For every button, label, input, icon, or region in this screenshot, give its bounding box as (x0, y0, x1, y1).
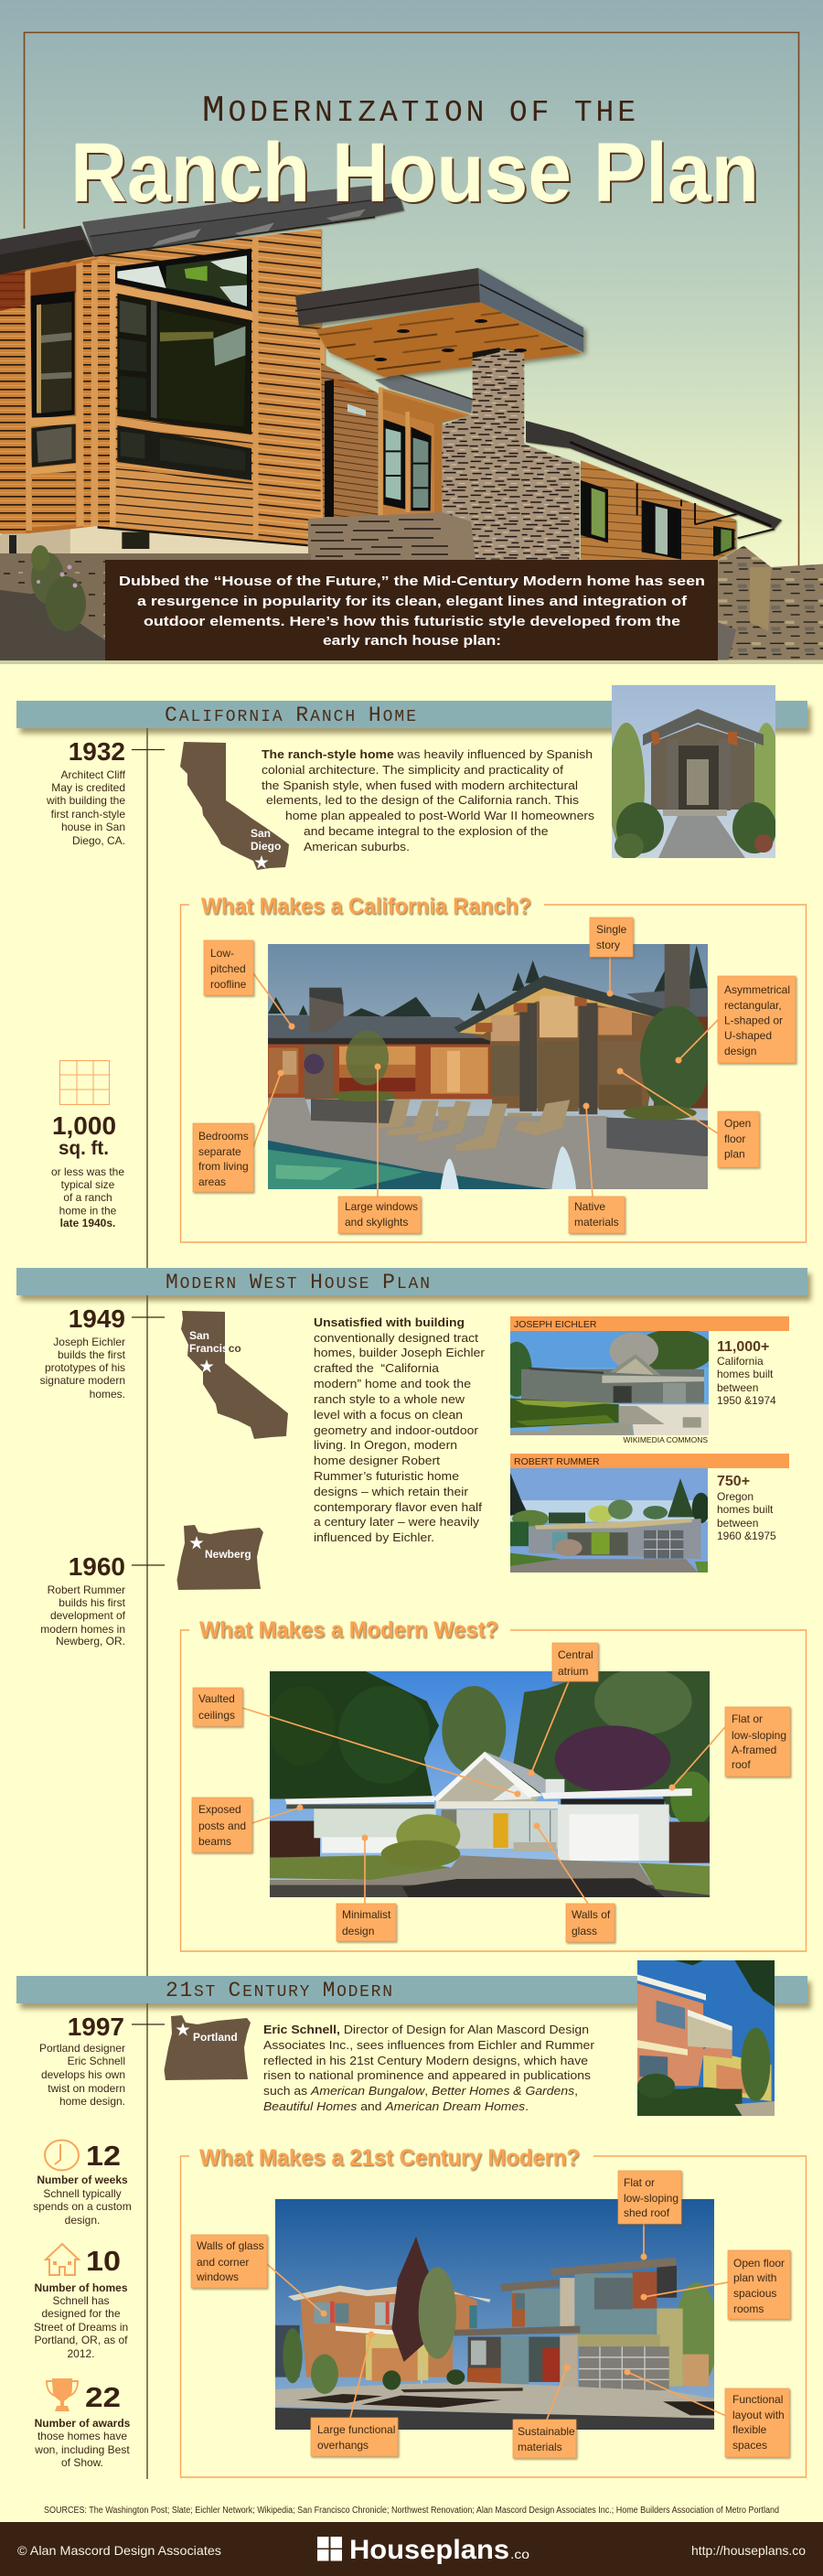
section header: California Ranch Home (16, 701, 807, 728)
event: 1997: twist on modern (48, 2082, 125, 2095)
illustration: house main body (0, 183, 404, 561)
event: 1932: 1932 (69, 737, 125, 766)
text: ranch-style home: The ranch-style home was heavily influenced by Spanish (262, 747, 593, 761)
stat: 1,000 sq. ft.: typical size (61, 1178, 115, 1191)
panel heading: What Makes a California Ranch? (201, 894, 531, 919)
callout: Functional layout with flexible spaces: Functional (732, 2393, 783, 2406)
event: 1997: Portland designer (39, 2042, 125, 2055)
text: ranch-style home (262, 747, 595, 853)
illustration: house canopy (295, 268, 583, 377)
stat: 1,000 sq. ft.: late 1940s. (60, 1217, 115, 1229)
callout: Low-pitched roofline: pitched (210, 962, 246, 975)
illustration: left ground and shrub (0, 545, 311, 660)
callout: Walls of glass and corner windows: windows (196, 2270, 239, 2283)
callout: Asymmetrical design: rectangular, (724, 999, 782, 1012)
callout: Flat or low-sloping A-framed roof: A-framed (732, 1744, 776, 1756)
event: 1949: signature modern (40, 1374, 125, 1387)
stat: 11,000+: 1950 &1974 (717, 1394, 776, 1407)
callout: Flat or low-sloping A-framed roof: low-sloping (732, 1729, 786, 1742)
photo: California ranch at dusk (268, 944, 708, 1189)
text: Unsatisfied with building (314, 1315, 486, 1544)
callout: Walls of glass: Walls of (572, 1908, 611, 1921)
callout: Open floor plan with spacious rooms: Open floor (733, 2257, 785, 2270)
text: Eric Schnell: risen to national prominence and appeared in publications (263, 2068, 592, 2082)
text: Unsatisfied with building: designs – which retain their (314, 1485, 469, 1498)
intro text box (105, 560, 718, 660)
stat: 11,000+ (717, 1339, 776, 1407)
icon: clock (45, 2141, 79, 2170)
text: Eric Schnell: Eric Schnell, Director of Design for Alan Mascord Design (263, 2023, 589, 2036)
hero title line two: Ranch House Plan (72, 128, 761, 221)
callout: Exposed posts and beams: posts and (198, 1819, 246, 1832)
card: Joseph Eichler: JOSEPH EICHLER (514, 1319, 597, 1330)
callout: Central atrium: atrium (558, 1665, 588, 1678)
text: ranch-style home: home plan appealed to post-World War II homeowners (285, 809, 595, 822)
callout: Functional layout with flexible spaces: layout with (732, 2409, 785, 2421)
section header: California Ranch Home: CALIFORNIA RANCH HOME (165, 703, 416, 727)
callout: Bedrooms separate: from living (198, 1160, 249, 1173)
callout: Minimalist design (337, 1835, 396, 1941)
callout: Low-pitched roofline: roofline (210, 978, 247, 991)
callout: Open floor plan with spacious rooms (640, 2250, 790, 2319)
callout: Vaulted ceilings: ceilings (198, 1709, 235, 1722)
event: 1932 (46, 737, 165, 847)
callout: Walls of glass (534, 1822, 615, 1942)
event: 1960: modern homes in (40, 1623, 125, 1636)
hero title line two: Ranch House Plan (70, 126, 759, 220)
stat: 750+: between (717, 1517, 758, 1530)
callout: Flat or low-sloping A-framed roof: roof (732, 1758, 751, 1771)
callout: Sustainable materials: Sustainable (518, 2425, 575, 2438)
stat: 10 homes: Number of homes (34, 2281, 128, 2294)
callout: Low-pitched roofline: Low- (210, 947, 234, 960)
intro text box: Dubbed the “House of the Future,” the Mid-Century Modern home has seen (119, 574, 705, 589)
event: 1932: Diego, CA. (72, 834, 125, 847)
text: Unsatisfied with building: influenced by Eichler. (314, 1530, 434, 1544)
hero title line one: MODERNIZATION OF THE (202, 91, 636, 133)
event: 1960: development of (50, 1609, 126, 1622)
text: ranch-style home: and became integral to the explosion of the (304, 824, 549, 838)
photo: Rummer home (510, 1468, 708, 1572)
map: Oregon with Newberg (177, 1525, 263, 1590)
stat: 10 homes: Portland, OR, as of (34, 2334, 128, 2346)
intro text box: a resurgence in popularity for its clean, elegant lines and integration of (137, 594, 688, 609)
callout: Open floor plan: Open (724, 1117, 751, 1130)
event: 1932: May is credited (51, 781, 125, 794)
callout: Large windows and skylights (338, 1063, 421, 1233)
event: 1949 (40, 1304, 165, 1401)
callout: Native materials (569, 1103, 625, 1233)
card: Joseph Eichler: WIKIMEDIA COMMONS (623, 1435, 708, 1444)
logo: Houseplans.co: Houseplans (349, 2535, 509, 2565)
callout: Exposed posts and beams: beams (198, 1835, 231, 1848)
card: Robert Rummer (510, 1454, 789, 1572)
stat: 11,000+: homes built (717, 1368, 774, 1380)
callout: Flat or low-sloping shed roof (618, 2171, 681, 2259)
stat: 12 weeks: 12 (86, 2140, 121, 2172)
callout: Asymmetrical design: U-shaped (724, 1029, 772, 1042)
text: ranch-style home: colonial architecture. The simplicity and practicality of (262, 763, 563, 777)
text: Unsatisfied with building: level with a focus on clean (314, 1408, 463, 1422)
illustration: house low stone wall (308, 512, 476, 560)
callout: Flat or low-sloping shed roof: Flat or (624, 2176, 655, 2189)
callout: Bedrooms separate: areas (198, 1175, 226, 1188)
callout: Open floor plan with spacious rooms: spacious (733, 2287, 776, 2300)
text: Unsatisfied with building: Unsatisfied with building (314, 1315, 465, 1329)
stat: 750+: 750+ (717, 1474, 750, 1489)
event: 1932: with building the (46, 794, 125, 807)
callout: Vaulted ceilings (193, 1688, 521, 1797)
text: Unsatisfied with building: contemporary flavor even half (314, 1500, 482, 1514)
map: Oregon with Portland (165, 2015, 251, 2080)
stat: 12 weeks: Number of weeks (37, 2174, 128, 2186)
stat: 10 homes: 2012. (67, 2347, 95, 2360)
text: Eric Schnell: Beautiful Homes and American Dream Homes . (263, 2099, 529, 2113)
stat: 22 awards: of Show. (61, 2456, 103, 2469)
text: ranch-style home: the Spanish style, when fused with modern architectural (262, 778, 578, 792)
text: Unsatisfied with building: modern” home and took the (314, 1377, 471, 1390)
callout: Open floor plan with spacious rooms: rooms (733, 2302, 764, 2315)
stat: 22 awards: won, including Best (34, 2443, 130, 2456)
stat: 1,000 sq. ft. (51, 1061, 124, 1229)
stat: 1,000 sq. ft.: of a ranch (63, 1191, 112, 1204)
stat: 1,000 sq. ft.: or less was the (51, 1165, 124, 1178)
photo: Modern West home (270, 1671, 710, 1897)
event: 1949: homes. (90, 1388, 125, 1401)
section header: 21st Century Modern (16, 1976, 807, 2003)
callout: Open floor plan with spacious rooms: plan with (733, 2271, 776, 2284)
stat: 10 homes (34, 2244, 128, 2360)
stat: 10 homes: Schnell has (52, 2294, 110, 2307)
event: 1960: Newberg, OR. (56, 1635, 125, 1648)
illustration: right rocks (718, 546, 823, 660)
event: 1932: first ranch-style (51, 808, 125, 821)
text: Unsatisfied with building: ranch style to a whole new (314, 1392, 465, 1406)
callout: Walls of glass and corner windows: Walls of glass (197, 2239, 264, 2252)
map: California with San Diego (180, 742, 289, 870)
stat: 22 awards: Number of awards (35, 2417, 131, 2430)
stat: 10 homes: 10 (86, 2245, 121, 2277)
text: Unsatisfied with building: living. In Oregon, modern (314, 1438, 457, 1452)
event: 1960 (40, 1552, 165, 1648)
text: Unsatisfied with building: a century later – were heavily (314, 1515, 480, 1529)
event: 1949: prototypes of his (45, 1361, 125, 1374)
callout: Minimalist design: Minimalist (342, 1908, 391, 1921)
text: ranch-style home: American suburbs. (304, 840, 410, 853)
callout: Native materials: materials (574, 1216, 619, 1229)
callout: Flat or low-sloping A-framed roof: Flat or (732, 1712, 763, 1725)
callout: Walls of glass: glass (572, 1925, 597, 1937)
stat: 1,000 sq. ft.: sq. ft. (59, 1138, 109, 1159)
stat: 12 weeks: spends on a custom (33, 2200, 132, 2213)
event: 1949: builds the first (58, 1348, 126, 1361)
event: 1997: home design. (59, 2095, 125, 2108)
callout: Low-pitched roofline (204, 940, 294, 1030)
icon: trophy (46, 2378, 79, 2411)
text: Eric Schnell: such as American Bungalow , Better Homes & Gardens , (263, 2084, 578, 2098)
panel: What Makes a Modern West (181, 1617, 807, 1951)
text: Unsatisfied with building: home designer Robert (314, 1454, 440, 1467)
stat: 750+: 1960 &1975 (717, 1530, 776, 1542)
stat: 22 awards: 22 (85, 2381, 121, 2413)
callout: Walls of glass and corner windows (191, 2235, 327, 2316)
illustration: house right wing (375, 373, 782, 560)
stat: 22 awards (34, 2378, 131, 2469)
callout: Asymmetrical design: Asymmetrical (724, 983, 790, 996)
section header: Modern West House Plan (16, 1268, 807, 1295)
callout: Bedrooms separate (193, 1070, 283, 1192)
callout: Exposed posts and beams: Exposed (198, 1803, 241, 1816)
callout: Walls of glass and corner windows: and corner (197, 2256, 249, 2269)
map: California with San Francisco: San (189, 1329, 209, 1342)
event: 1960: Robert Rummer (48, 1583, 125, 1596)
callout: Flat or low-sloping A-framed roof (669, 1707, 790, 1791)
text: Unsatisfied with building: Rummer’s futuristic home (314, 1469, 459, 1483)
event: 1949: Joseph Eichler (53, 1336, 125, 1348)
text: ranch-style home: elements, led to the design of the California ranch. This (266, 793, 580, 807)
event: 1932: Architect Cliff (61, 768, 126, 781)
callout: Flat or low-sloping shed roof: shed roof (624, 2206, 670, 2219)
stat: 12 weeks: design. (65, 2214, 100, 2227)
icon: house (46, 2244, 79, 2275)
callout: Large functional overhangs: overhangs (317, 2439, 369, 2452)
callout: Large windows and skylights: and skylights (345, 1216, 408, 1229)
map: Oregon with Portland: Portland (193, 2031, 238, 2044)
stat: 750+ (717, 1474, 776, 1542)
panel heading: What Makes a 21st Century Modern? (199, 2145, 580, 2171)
photo: 21st century home side view (637, 1960, 775, 2116)
event: 1949: 1949 (69, 1304, 125, 1333)
photo: Eichler home (510, 1331, 709, 1435)
callout: Asymmetrical design: L-shaped or (724, 1014, 783, 1026)
callout: Large windows and skylights: Large windows (345, 1200, 418, 1213)
photo: 21st century modern home (275, 2199, 714, 2430)
callout: Bedrooms separate: separate (198, 1145, 241, 1158)
callout: Sustainable materials: materials (518, 2441, 562, 2453)
callout: Single story: story (596, 939, 620, 951)
stat: 12 weeks (33, 2140, 132, 2227)
callout: Vaulted ceilings: Vaulted (198, 1692, 235, 1705)
intro text box: early ranch house plan: (323, 633, 501, 649)
stat: 11,000+: between (717, 1381, 758, 1394)
stat: 22 awards: those homes have (37, 2430, 127, 2442)
illustration: stone pillar (473, 348, 524, 519)
callout: Asymmetrical design: design (724, 1045, 756, 1057)
section header: 21st Century Modern: 21ST CENTURY MODERN (166, 1979, 392, 2002)
logo: Houseplans.co: .co (510, 2547, 529, 2561)
callout: Flat or low-sloping shed roof: low-sloping (624, 2192, 679, 2205)
stat: 1,000 sq. ft.: 1,000 (52, 1111, 116, 1140)
callout: Central atrium (529, 1643, 598, 1776)
icon: floor plan grid (60, 1061, 110, 1105)
callout: Minimalist design: design (342, 1925, 374, 1937)
text: Unsatisfied with building: homes, builder Joseph Eichler (314, 1346, 486, 1359)
event: 1960: builds his first (59, 1596, 126, 1609)
text: Eric Schnell: reflected in his 21st Century Modern designs, which have (263, 2054, 588, 2067)
stat: 12 weeks: Schnell typically (43, 2187, 122, 2200)
map: California with San Francisco (181, 1311, 288, 1439)
stat: 11,000+: California (717, 1355, 764, 1368)
panel: What Makes a California Ranch (181, 894, 807, 1242)
callout: Open floor plan (616, 1068, 759, 1167)
event: 1932: house in San (61, 821, 125, 833)
callout: Open floor plan: floor (724, 1132, 745, 1145)
section header: Modern West House Plan: MODERN WEST HOUSE PLAN (166, 1271, 430, 1294)
hero frame (24, 33, 799, 569)
callout: Single story (590, 918, 633, 997)
stat: 750+: Oregon (717, 1490, 754, 1503)
callout: Functional layout with flexible spaces: flexible (732, 2423, 767, 2436)
callout: Native materials: Native (574, 1200, 605, 1213)
callout: Central atrium: Central (558, 1648, 593, 1661)
event: 1997: 1997 (68, 2012, 124, 2041)
map: Oregon with Newberg: Newberg (205, 1548, 251, 1561)
text: Eric Schnell: Associates Inc., sees influences from Eichler and Rummer (263, 2038, 595, 2052)
footer credit: © Alan Mascord Design Associates (17, 2543, 221, 2558)
event: 1997: Eric Schnell (68, 2055, 125, 2067)
hero panel (0, 0, 823, 664)
timeline line (146, 723, 148, 2479)
event: 1997: develops his own (41, 2068, 125, 2081)
callout: Asymmetrical design (675, 976, 796, 1063)
stat: 750+: homes built (717, 1503, 774, 1516)
panel: What Makes a 21st Century Modern (181, 2145, 807, 2477)
card: Robert Rummer: ROBERT RUMMER (514, 1456, 600, 1467)
map: California with San Diego: San (251, 827, 271, 840)
stat: 11,000+: 11,000+ (717, 1339, 769, 1355)
event: 1960: 1960 (69, 1552, 125, 1581)
callout: Open floor plan: plan (724, 1147, 745, 1160)
intro text box: outdoor elements. Here’s how this futuristic style developed from the (144, 614, 680, 629)
stat: 10 homes: Street of Dreams in (34, 2321, 128, 2334)
callout: Large functional overhangs (311, 2331, 398, 2456)
callout: Large functional overhangs: Large functional (317, 2423, 395, 2436)
footer url: http://houseplans.co (691, 2543, 806, 2558)
text: Unsatisfied with building: conventionally designed tract (314, 1331, 478, 1345)
text: Unsatisfied with building: crafted the “California (314, 1361, 440, 1375)
photo: California ranch entry (612, 685, 775, 858)
map: California with San Francisco: Francisco (189, 1342, 241, 1355)
text: Eric Schnell (263, 2023, 595, 2113)
text: Unsatisfied with building: geometry and indoor-outdoor (314, 1423, 479, 1437)
callout: Exposed posts and beams (192, 1798, 304, 1852)
footer band (0, 2522, 823, 2576)
callout: Functional layout with flexible spaces (624, 2369, 789, 2457)
callout: Bedrooms separate: Bedrooms (198, 1130, 249, 1143)
event: 1997 (39, 2012, 165, 2108)
callout: Functional layout with flexible spaces: spaces (732, 2439, 767, 2452)
stat: 1,000 sq. ft.: home in the (59, 1204, 117, 1217)
callout: Single story: Single (596, 923, 627, 936)
callout: Sustainable materials (513, 2364, 576, 2458)
panel heading: What Makes a Modern West? (199, 1617, 498, 1643)
stat: 10 homes: designed for the (41, 2307, 121, 2320)
card: Joseph Eichler (501, 1316, 789, 1444)
map: California with San Diego: Diego (251, 840, 281, 853)
